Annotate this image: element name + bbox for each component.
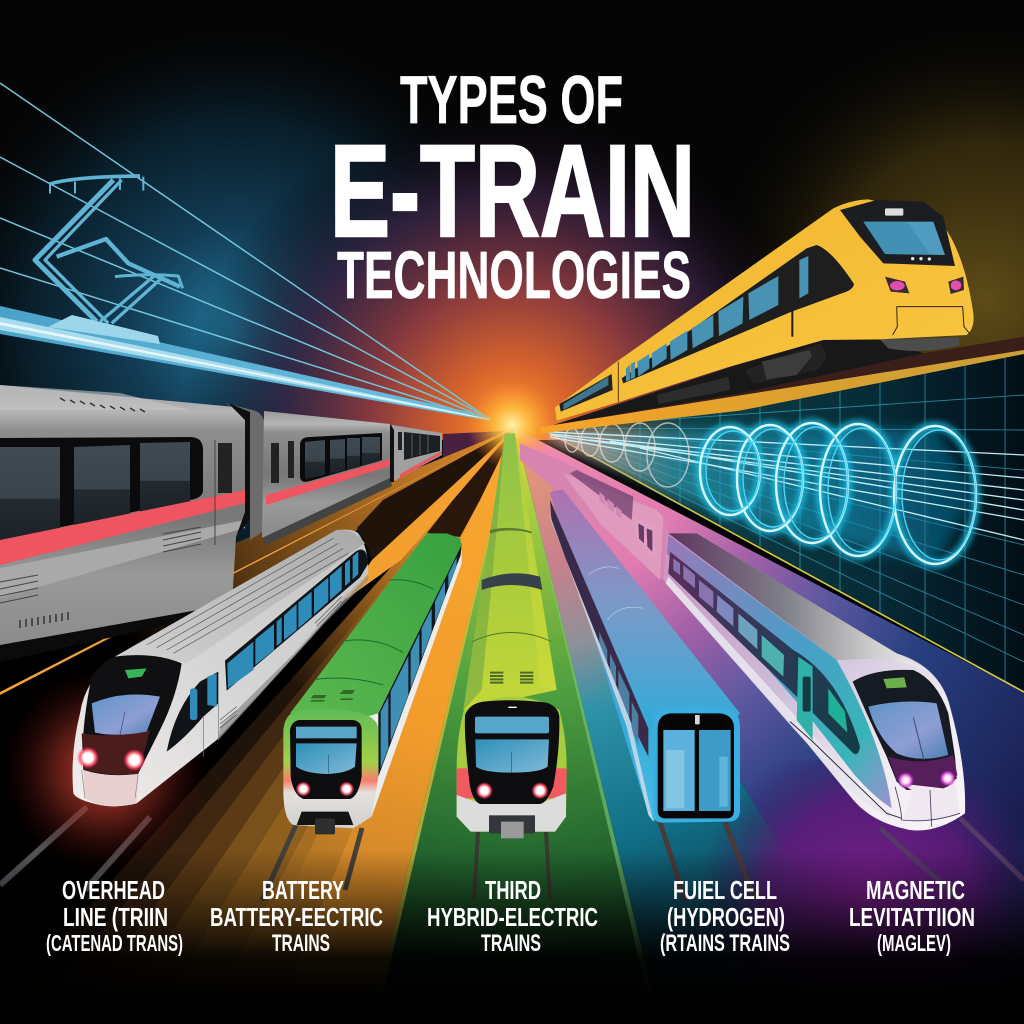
front xyxy=(283,709,378,828)
window block xyxy=(0,437,203,540)
tube glow xyxy=(545,428,975,565)
cab xyxy=(840,200,955,266)
silver body xyxy=(663,533,965,830)
label: overhead line: OVERHEAD xyxy=(62,875,165,905)
glowing rings xyxy=(700,423,976,564)
label: third: THIRD xyxy=(485,875,541,905)
side xyxy=(367,550,462,817)
front frame xyxy=(653,706,740,823)
maglev guide lines xyxy=(550,432,1024,540)
windows xyxy=(563,256,808,410)
brown band behind grey and silver trains xyxy=(0,428,515,760)
grey train xyxy=(0,385,442,662)
platform under yellow train xyxy=(553,337,1024,425)
headlights xyxy=(885,277,909,293)
label: battery xyxy=(210,875,383,957)
horizon ground wedges xyxy=(0,428,1024,1024)
side windows xyxy=(550,500,648,757)
car body xyxy=(555,199,974,421)
label: overhead line xyxy=(46,875,183,956)
rails xyxy=(0,807,1024,900)
title xyxy=(330,62,695,313)
car three xyxy=(392,425,442,481)
icon: pantograph xyxy=(35,176,183,323)
red stripe xyxy=(0,490,245,565)
title: E-TRAIN xyxy=(330,117,695,264)
window band xyxy=(668,552,860,754)
grid panel xyxy=(540,350,1024,692)
flare at vanishing point xyxy=(467,380,557,470)
lime green train xyxy=(457,433,567,838)
windows xyxy=(673,558,784,677)
blue train xyxy=(549,490,740,823)
label: third xyxy=(427,875,598,957)
label: maglev: LEVITATTIION xyxy=(849,902,975,932)
silver body xyxy=(72,530,368,806)
label: fuel cell: (RTAINS TRAINS xyxy=(660,930,790,957)
side band xyxy=(667,535,892,808)
faint tube rings xyxy=(565,423,689,487)
undercarriage xyxy=(553,339,923,425)
window band xyxy=(225,550,368,691)
label: third: TRAINS xyxy=(481,930,541,957)
label: fuel cell xyxy=(660,875,790,957)
green train xyxy=(283,533,462,834)
silver roof xyxy=(115,530,365,663)
car one xyxy=(0,385,250,650)
coupler xyxy=(489,815,535,833)
car two xyxy=(262,411,390,538)
blue roof streak xyxy=(0,306,490,421)
maglev train xyxy=(663,533,965,830)
gangway xyxy=(225,403,265,540)
overhead wires xyxy=(0,83,488,420)
headlights xyxy=(898,772,914,788)
label: overhead line: (CATENAD TRANS) xyxy=(46,930,183,956)
label: battery: BATTERY xyxy=(262,875,344,905)
maglev coil tube xyxy=(545,423,1024,565)
front face xyxy=(457,697,567,832)
label: battery: BATTERY-EECTRIC xyxy=(210,902,383,932)
silver train xyxy=(72,530,368,806)
dark gaps near horizon xyxy=(357,428,515,560)
red headlight glow xyxy=(0,665,210,875)
brown ray fan xyxy=(0,428,515,1024)
roof xyxy=(668,533,927,670)
label: maglev: (MAGLEV) xyxy=(877,930,951,956)
lower shade xyxy=(218,575,368,740)
thin orange line xyxy=(0,428,515,695)
roof vents xyxy=(60,398,145,412)
label: maglev xyxy=(849,875,975,956)
label: battery: TRAINS xyxy=(272,930,330,957)
title: TECHNOLOGIES xyxy=(337,238,691,313)
nose xyxy=(83,655,182,775)
roof highlights xyxy=(588,567,643,620)
yellow train xyxy=(540,199,1024,433)
nose xyxy=(853,670,957,790)
window band xyxy=(559,374,613,412)
cabin cheek xyxy=(167,672,218,752)
bottom fade xyxy=(0,850,1024,1000)
title: TYPES OF xyxy=(400,62,623,138)
label: maglev: MAGNETIC xyxy=(866,875,965,905)
green roof xyxy=(290,533,462,717)
label: fuel cell: (HYDROGEN) xyxy=(667,902,785,932)
label: third: HYBRID-ELECTRIC xyxy=(427,902,598,932)
far pink train xyxy=(520,443,670,580)
label: fuel cell: FUIEL CELL xyxy=(673,875,777,905)
label: overhead line: LINE (TRIIN xyxy=(63,902,168,932)
